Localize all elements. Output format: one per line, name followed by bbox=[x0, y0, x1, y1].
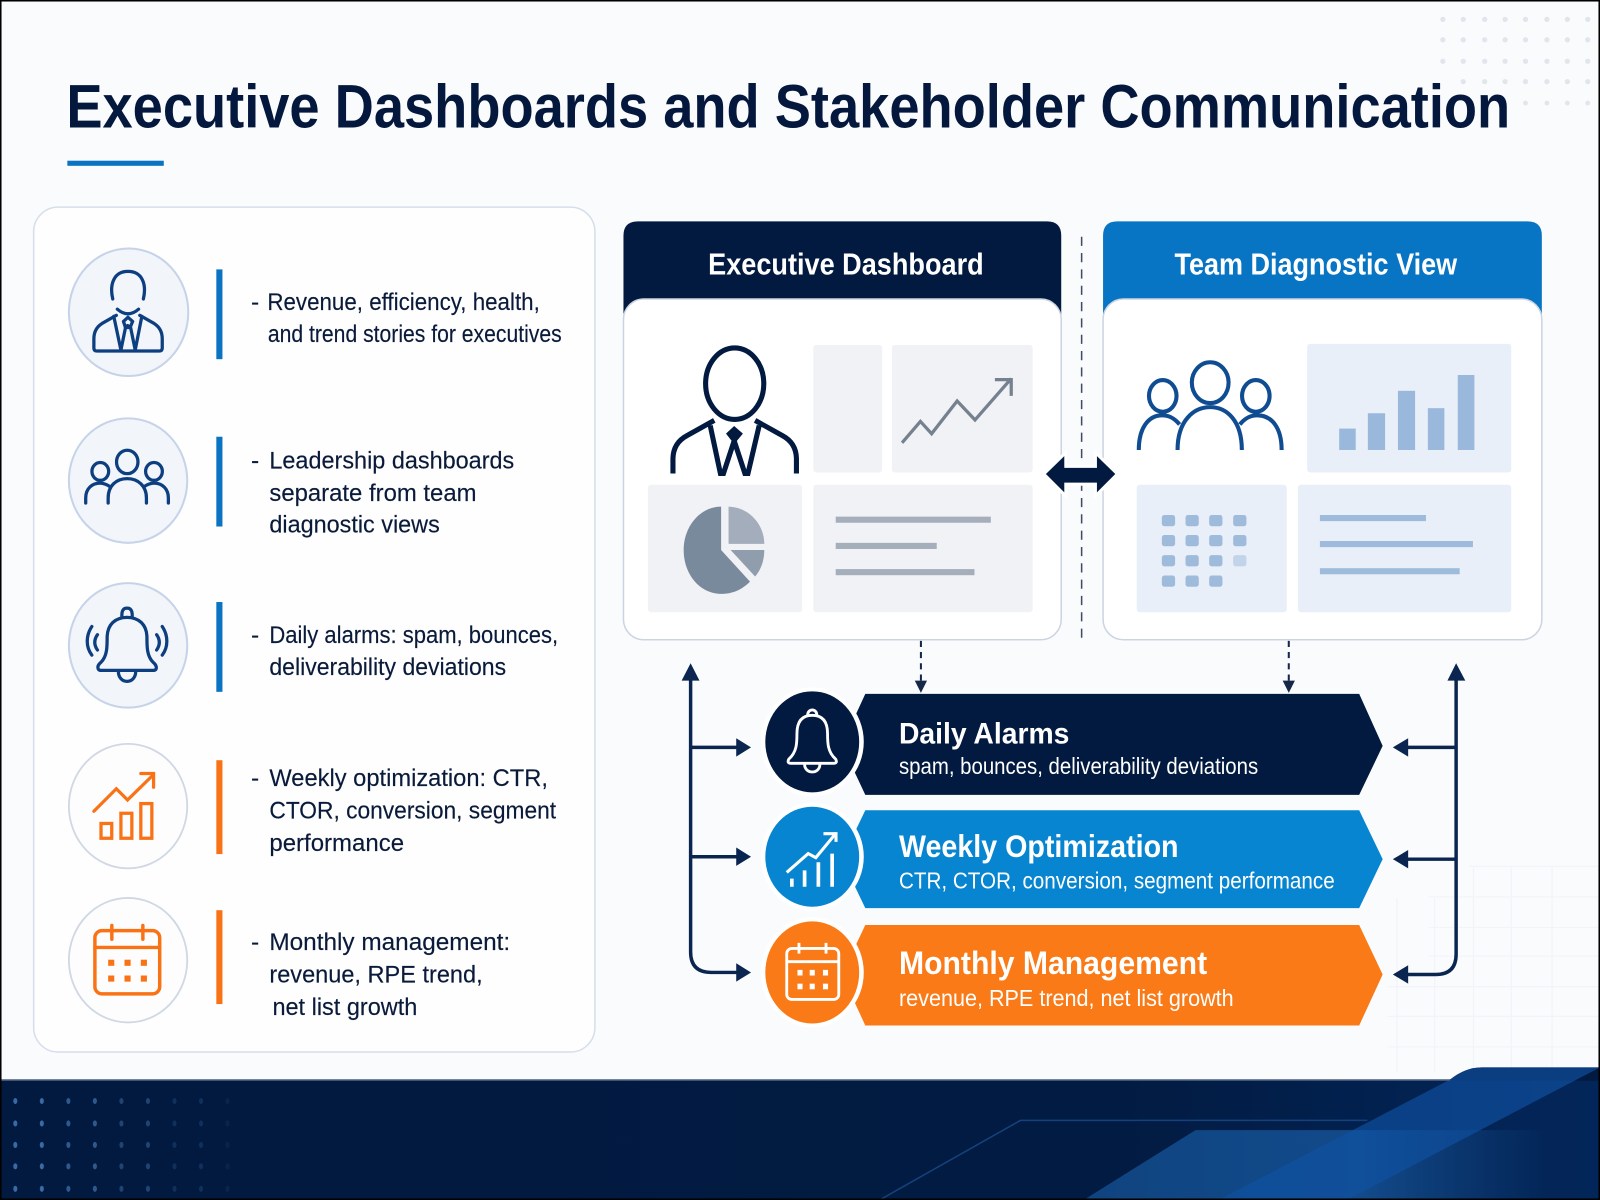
arrows: right feedback bracket bbox=[1393, 663, 1465, 984]
arrow: two-way between views bbox=[1046, 456, 1115, 492]
list item: executives bbox=[69, 248, 562, 376]
banner: daily alarms bbox=[761, 687, 1383, 796]
text: executives: and trend stories for executives bbox=[268, 321, 562, 348]
list item: daily alarms bbox=[69, 583, 558, 708]
banner text: Monthly Management bbox=[899, 944, 1207, 981]
text: daily alarms: deliverability deviations bbox=[269, 654, 506, 681]
panel: executive dashboard bbox=[623, 221, 1061, 640]
text: daily alarms: - bbox=[251, 622, 259, 649]
tile: trend chart bbox=[892, 345, 1033, 472]
text: leadership: Leadership dashboards bbox=[269, 447, 514, 474]
text: leadership: - bbox=[251, 447, 259, 474]
list item: weekly optimization bbox=[69, 744, 556, 868]
text: leadership bbox=[251, 447, 514, 539]
banner text: Daily Alarms bbox=[899, 717, 1069, 750]
text: monthly management: net list growth bbox=[272, 994, 417, 1021]
panel: team diagnostic view bbox=[1103, 221, 1542, 640]
footer band bbox=[0, 1067, 1600, 1200]
icon: bell bbox=[788, 710, 836, 772]
heading: team diagnostic view: Team Diagnostic View bbox=[1174, 247, 1457, 281]
banner: monthly management bbox=[761, 917, 1383, 1028]
text: weekly optimization: Weekly optimization: CTR, bbox=[269, 765, 548, 792]
tile: pie chart bbox=[648, 485, 802, 612]
center dashed divider bbox=[1081, 237, 1083, 641]
tile: text summary bbox=[1298, 485, 1511, 612]
banner text: Weekly Optimization bbox=[899, 828, 1179, 864]
list item: leadership bbox=[69, 418, 514, 543]
tile: dot grid bbox=[1137, 485, 1287, 612]
text: daily alarms: Daily alarms: spam, bounces, bbox=[269, 622, 558, 649]
icon: executive bbox=[94, 271, 162, 351]
arrow: executive dashboard to banners bbox=[915, 641, 927, 693]
text: weekly optimization: CTOR, conversion, segment bbox=[269, 797, 556, 824]
text: monthly management bbox=[251, 929, 510, 1021]
banner text: CTR, CTOR, conversion, segment performance bbox=[899, 867, 1335, 893]
banner text bbox=[899, 717, 1258, 779]
text: weekly optimization bbox=[251, 765, 556, 857]
icon: growth chart bbox=[94, 773, 154, 838]
tile: bar chart bbox=[1307, 344, 1511, 472]
banner text: revenue, RPE trend, net list growth bbox=[899, 985, 1234, 1011]
heading: executive dashboard: Executive Dashboard bbox=[708, 247, 984, 281]
text: weekly optimization: performance bbox=[269, 830, 404, 857]
icon: executive figure bbox=[673, 348, 796, 473]
arrows: left feedback bracket bbox=[682, 663, 751, 982]
title accent underline bbox=[67, 161, 164, 166]
arrow: team view to banners bbox=[1283, 641, 1295, 693]
panel: stakeholder list bbox=[34, 207, 595, 1052]
text: monthly management: - bbox=[251, 929, 259, 956]
icon: calendar bbox=[95, 926, 160, 994]
text: executives: Revenue, efficiency, health, bbox=[267, 289, 540, 316]
tile: text summary bbox=[813, 485, 1033, 612]
text: executives: - bbox=[251, 289, 259, 316]
text: leadership: separate from team bbox=[269, 480, 477, 507]
list item: monthly management bbox=[69, 898, 510, 1022]
text: executives bbox=[251, 289, 562, 348]
banner text: spam, bounces, deliverability deviations bbox=[899, 753, 1258, 779]
icon: calendar bbox=[787, 943, 839, 999]
text: daily alarms bbox=[251, 622, 558, 681]
icon: team group bbox=[1139, 362, 1282, 450]
text: weekly optimization: - bbox=[251, 765, 259, 792]
banner text bbox=[899, 944, 1234, 1011]
icon: team bbox=[86, 450, 168, 503]
text: monthly management: Monthly management: bbox=[269, 929, 510, 956]
banner: weekly optimization bbox=[761, 803, 1383, 911]
banner text bbox=[899, 828, 1335, 893]
icon: growth bars bbox=[787, 834, 836, 887]
icon: ringing bell bbox=[87, 608, 167, 681]
text: leadership: diagnostic views bbox=[269, 512, 440, 539]
text: monthly management: revenue, RPE trend, bbox=[269, 962, 483, 989]
